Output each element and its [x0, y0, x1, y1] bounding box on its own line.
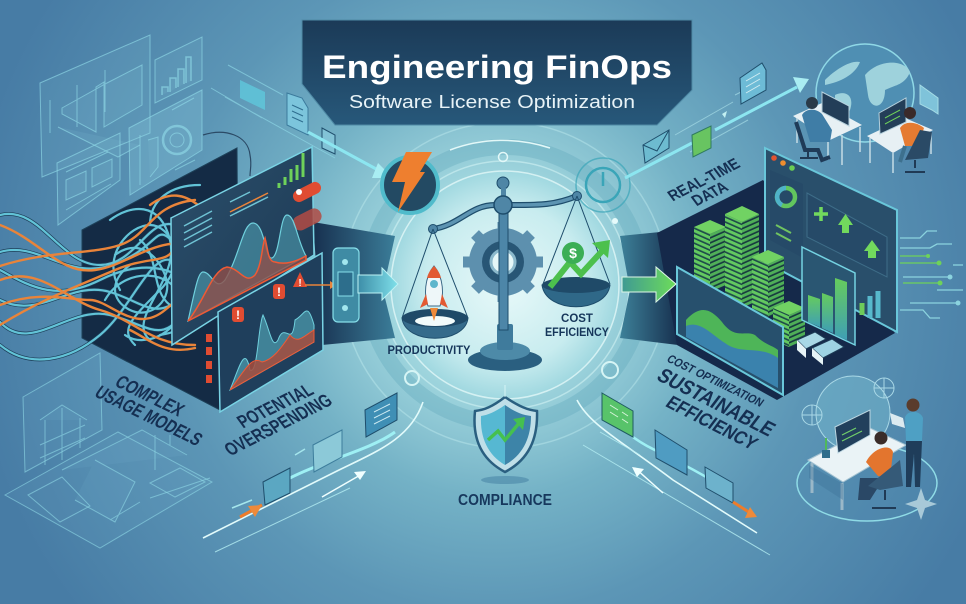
label: cost efficiency: EFFICIENCY — [545, 327, 609, 339]
label: productivity: PRODUCTIVITY — [388, 345, 471, 357]
panel: right dashboard — [657, 148, 897, 400]
floor — [657, 180, 895, 400]
donut — [777, 188, 795, 206]
subtitle: Software License Optimization — [349, 92, 635, 112]
label: cost optimization, sustainable efficiency: SUSTAINABLE — [652, 365, 779, 441]
small flow tiles, top left — [203, 80, 335, 176]
label: potential overspending: POTENTIAL — [234, 380, 318, 433]
front trend chart screen — [677, 267, 783, 395]
flow arrow to top right — [625, 77, 809, 178]
chart area — [230, 311, 314, 390]
sparkle — [905, 488, 937, 520]
faint wireframe blueprints, top left — [40, 35, 335, 225]
label: real-time data: DATA — [688, 178, 732, 210]
alert icons — [232, 307, 244, 322]
arrows — [814, 207, 828, 221]
tangled wires — [0, 185, 200, 359]
red pills — [291, 180, 323, 204]
beam — [433, 196, 577, 229]
left pan — [402, 318, 468, 338]
monitor — [835, 410, 870, 453]
plant — [822, 450, 830, 458]
flow bottom left — [203, 371, 423, 552]
illustration: timer icon — [576, 158, 630, 224]
illustration: top right workers — [793, 44, 938, 173]
panel: overspending chart bottom: ! — [277, 285, 281, 299]
seated person — [858, 432, 903, 508]
rocket — [420, 266, 448, 321]
panel: overspending chart bottom: ! — [298, 278, 302, 289]
green arrow with dollar coin — [550, 240, 610, 287]
panel: overspending chart top — [171, 147, 324, 345]
area chart — [188, 215, 306, 321]
base — [468, 349, 542, 371]
bar chart screen — [802, 247, 855, 345]
back screen — [765, 148, 897, 332]
chat bubble — [920, 85, 938, 114]
data stacks — [694, 206, 805, 347]
right pan — [542, 285, 610, 307]
green arrow with dollar coin: $ — [569, 245, 577, 261]
green signal bars — [279, 153, 303, 188]
globe — [816, 44, 914, 142]
label: cost optimization, sustainable efficiency: EFFICIENCY — [661, 393, 762, 454]
flow bottom right — [577, 362, 770, 555]
post — [499, 205, 508, 330]
cash bundles — [797, 332, 844, 365]
label: complex usage models: COMPLEX — [111, 372, 188, 421]
illustration: balance scale with gear — [402, 177, 610, 371]
text lines — [184, 192, 268, 247]
green arrow into right panel — [622, 267, 676, 302]
illustration: bottom right workers — [797, 376, 937, 521]
gear — [463, 222, 543, 302]
connector node with arrow — [305, 248, 398, 322]
label: cost optimization, sustainable efficiency: COST OPTIMIZATION — [664, 352, 767, 409]
panel: overspending chart bottom: ! — [236, 308, 240, 322]
label: complex usage models — [90, 372, 206, 450]
standing person — [890, 398, 923, 487]
flow arrow into lightning — [308, 132, 393, 178]
panel: overspending chart bottom — [218, 253, 323, 412]
connector band: center to right — [620, 232, 678, 345]
label: compliance: COMPLIANCE — [458, 492, 552, 509]
person left — [793, 92, 862, 165]
label: potential overspending: OVERSPENDING — [221, 391, 337, 460]
floor ring — [797, 445, 937, 521]
label: complex usage models: USAGE MODELS — [90, 383, 206, 450]
central rings — [342, 122, 668, 448]
label: cost efficiency: COST — [561, 313, 593, 325]
faint wireframe blueprints, bottom left — [5, 353, 212, 548]
side legend squares — [206, 334, 212, 383]
title: Engineering FinOps — [322, 49, 672, 85]
data circuit lines, right side — [900, 231, 963, 318]
panel: tangled complex usage models — [0, 148, 238, 410]
title banner — [302, 20, 692, 125]
illustration: lightning icon — [382, 152, 438, 213]
desk — [808, 428, 906, 482]
connector band: left to center — [313, 222, 395, 345]
network globe — [802, 376, 894, 450]
person right — [867, 98, 933, 173]
chains — [402, 196, 610, 318]
small document, envelope and chart tiles — [643, 63, 766, 163]
label: real-time data: REAL-TIME — [664, 155, 744, 205]
illustration: compliance shield — [474, 385, 537, 484]
